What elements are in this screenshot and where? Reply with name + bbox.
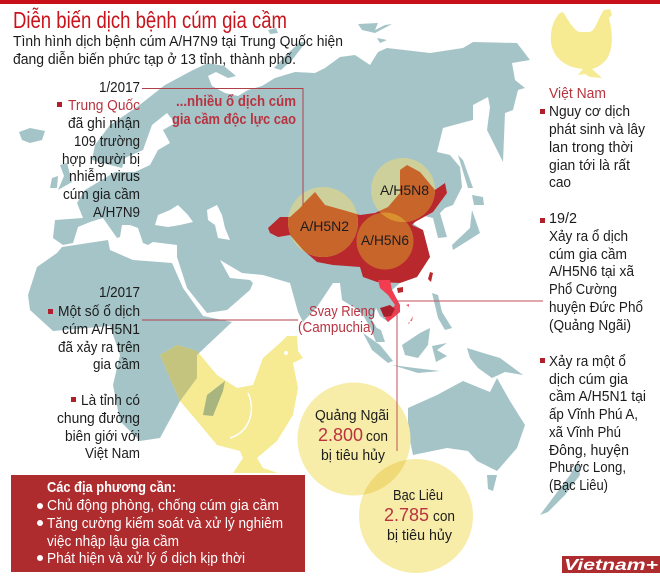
text block: Bac Lieu outbreak: dịch cúm gia [549, 371, 629, 388]
small yellow chicken [551, 9, 612, 78]
text block: Bac Lieu outbreak: Xảy ra một ổ [549, 353, 626, 370]
text block: Cambodia outbreak: đã xảy ra trên [58, 339, 140, 356]
label: Svay Rieng [298, 303, 375, 336]
text block: Cambodia outbreak [48, 284, 140, 462]
panel: recommendations: Tăng cường kiểm soát và xử lý nghiêm [47, 515, 283, 532]
text block: Bac Lieu outbreak: xã Vĩnh Phú [549, 424, 621, 441]
text block: Quang Ngai outbreak: A/H5N6 tại xã [549, 263, 635, 280]
leader line: Svay Rieng [142, 319, 298, 321]
panel: recommendations: Phát hiện và xử lý ổ dịch kịp thời [47, 550, 245, 567]
callout: high pathogenic outbreaks: gia cầm độc lực cao [172, 111, 296, 128]
text block: Vietnam risk: Nguy cơ dịch [549, 103, 630, 120]
panel: recommendations [11, 475, 305, 572]
text block: Quang Ngai outbreak: 19/2 [549, 210, 577, 227]
logo: Vietnam+ [562, 556, 660, 574]
strain circle: A/H5N8 [371, 158, 435, 222]
strain labels: A/H5N8 [380, 182, 429, 198]
text block: Bac Lieu outbreak: Phước Long, [549, 459, 626, 476]
bubble: Quang Ngai: bị tiêu hủy [321, 447, 385, 464]
bubble: Bac Lieu: 2.785 [384, 505, 429, 525]
callout: high pathogenic outbreaks [172, 93, 296, 128]
text block: Cambodia outbreak: Một số ổ dịch [58, 303, 140, 320]
text block: Quang Ngai outbreak: cúm gia cầm [549, 246, 627, 263]
text block: Bac Lieu outbreak [540, 353, 646, 494]
text block: Bac Lieu outbreak: ấp Vĩnh Phú A, [549, 406, 638, 423]
panel: recommendations: Các địa phương cần: [47, 479, 176, 496]
Hainan and Taiwan [397, 272, 433, 293]
logo: Vietnam+: Vietnam+ [564, 557, 658, 574]
text block: China: nhiễm virus [69, 168, 140, 185]
text block: Cambodia outbreak: 1/2017 [99, 284, 140, 301]
strain circle: A/H5N6 [356, 212, 414, 270]
text block: China: 109 trường [74, 133, 140, 150]
text block: Quang Ngai outbreak: Phổ Cường [549, 281, 617, 298]
Cambodia [380, 305, 395, 317]
Paracel and Spratly markers [406, 304, 413, 324]
text block: China: Trung Quốc [68, 97, 140, 114]
world map [19, 23, 580, 515]
text block: Cambodia outbreak: chung đường [57, 410, 140, 427]
text block: Quang Ngai outbreak: Xảy ra ổ dịch [549, 228, 628, 245]
text block: Vietnam risk: phát sinh và lây [549, 121, 645, 138]
leader line: Vietnam provinces [397, 301, 543, 451]
text block: Cambodia outbreak: Là tỉnh có [81, 392, 140, 409]
text block: Cambodia outbreak: cúm A/H5N1 [62, 321, 140, 338]
text block: Vietnam risk: gian tới là rất [549, 157, 631, 174]
text block: Bac Lieu outbreak: (Bạc Liêu) [549, 477, 608, 494]
inland seas [155, 205, 230, 240]
bubble: Quang Ngai: Quảng Ngãi [315, 407, 389, 424]
bubble: Bac Lieu [359, 459, 473, 573]
title: Diễn biến dịch bệnh cúm gia cầm [13, 7, 287, 33]
China outbreak map [268, 150, 447, 324]
text block: China: đã ghi nhận [68, 115, 140, 132]
text block: Vietnam risk: lan trong thời [549, 139, 633, 156]
subtitle [13, 33, 343, 68]
text block: Quang Ngai outbreak [540, 210, 643, 334]
bubble: Bac Lieu: bị tiêu hủy [387, 527, 452, 544]
text block: Vietnam risk: Việt Nam [549, 85, 606, 102]
strain labels [300, 182, 429, 248]
bubble: Quang Ngai: con [366, 428, 388, 445]
text block: Cambodia outbreak: biên giới với [65, 428, 140, 445]
strain labels: A/H5N6 [361, 232, 409, 248]
callout: high pathogenic outbreaks: ...nhiều ổ dịch cúm [176, 93, 296, 110]
text block: Cambodia outbreak: Việt Nam [85, 445, 140, 462]
strain labels: A/H5N2 [300, 218, 349, 234]
bubble: Bac Lieu: con [433, 508, 455, 525]
large yellow chicken [160, 336, 303, 473]
bubble: Quang Ngai: 2.800 [318, 425, 363, 445]
text block: Bac Lieu outbreak: cầm A/H5N1 tại [549, 388, 646, 405]
subtitle: Tình hình dịch bệnh cúm A/H7N9 tại Trung Quốc hiện [13, 33, 343, 50]
label: Svay Rieng: (Campuchia) [298, 319, 375, 336]
panel: recommendations: Chủ động phòng, chống cúm gia cầm [47, 497, 279, 514]
bubble: Quang Ngai [298, 382, 410, 496]
subtitle: đang diễn biến phức tạp ở 13 tỉnh, thành phố. [13, 51, 296, 68]
bubble: Bac Lieu: Bạc Liêu [393, 487, 443, 504]
text block: China: A/H7N9 [93, 204, 140, 221]
text block: China: cúm gia cầm [63, 186, 140, 203]
text block: Cambodia outbreak: gia cầm [93, 356, 140, 373]
leader line: China [142, 88, 303, 205]
Vietnam [378, 280, 400, 322]
strain circle: A/H5N2 [288, 187, 358, 257]
text block: Bac Lieu outbreak: Đông, huyện [549, 442, 629, 459]
label: Svay Rieng: Svay Rieng [309, 303, 375, 320]
top red bar [0, 0, 660, 4]
text block: China: hợp người bị [62, 151, 140, 168]
text block: Quang Ngai outbreak: (Quảng Ngãi) [549, 317, 631, 334]
text block: Vietnam risk: cao [549, 174, 571, 191]
text block: China: 1/2017 [99, 79, 140, 96]
text block: Vietnam risk [540, 85, 645, 191]
panel: recommendations: việc nhập lậu gia cầm [47, 533, 179, 550]
text block: Quang Ngai outbreak: huyện Đức Phổ [549, 299, 643, 316]
text block: China [57, 79, 140, 221]
